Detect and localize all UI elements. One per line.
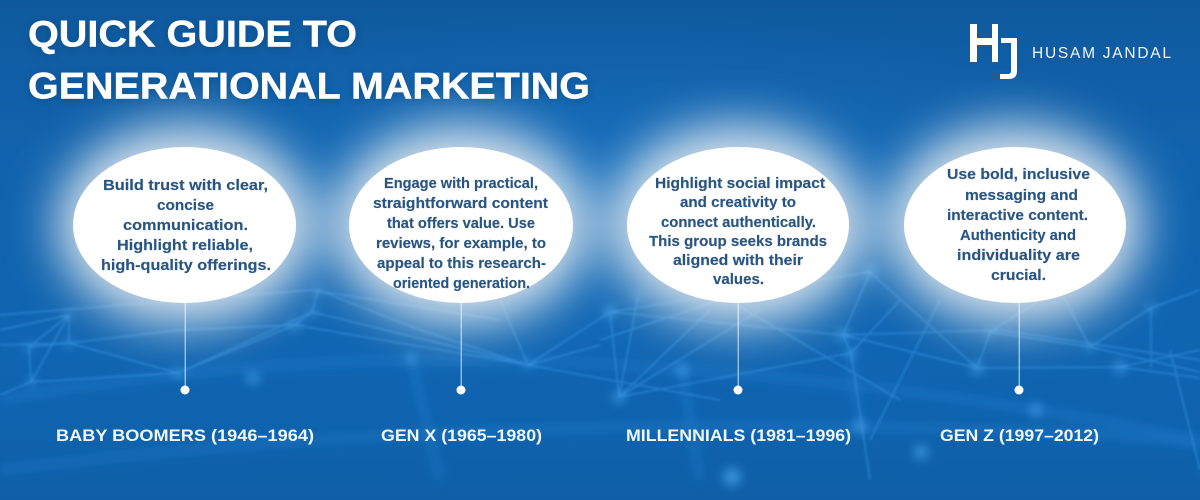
bubble advice text: aligned with their [673, 252, 803, 269]
bubble advice text: connect authentically. [661, 214, 816, 231]
bubble advice text [947, 166, 1090, 284]
panel: Gen Z [904, 147, 1126, 445]
bubble advice text [649, 175, 827, 288]
bubble advice text: that offers value. Use [387, 215, 535, 232]
bubble advice text: crucial. [991, 267, 1046, 284]
bubble [73, 147, 296, 303]
bubble advice text [373, 175, 548, 292]
bubble advice text: oriented generation. [393, 275, 530, 292]
logo: Husam Jandal [970, 24, 1171, 79]
bubble [349, 147, 573, 303]
bubble advice text: Build trust with clear, [103, 177, 268, 194]
bubble advice text: messaging and [965, 187, 1078, 204]
generation label: MILLENNIALS (1981–1996) [626, 426, 851, 445]
bubble advice text: communication. [123, 217, 248, 234]
background network pattern [0, 266, 1200, 486]
bubble advice text [101, 177, 271, 274]
connector line and dot [456, 303, 466, 394]
generation label: GEN Z (1997–2012) [940, 426, 1099, 445]
title: QUICK GUIDE TO [28, 14, 357, 54]
generation label: GEN X (1965–1980) [381, 426, 542, 445]
connector line and dot [1014, 303, 1024, 394]
bubble advice text: reviews, for example, to [376, 235, 546, 252]
bubble advice text: interactive content. [947, 207, 1088, 224]
bubble advice text: Engage with practical, [384, 175, 538, 192]
bubble advice text: This group seeks brands [649, 233, 827, 250]
bubble advice text: and creativity to [680, 194, 796, 211]
bubble advice text: Authenticity and [960, 227, 1076, 244]
panel: Millennials [626, 147, 851, 445]
bubble advice text: high-quality offerings. [101, 257, 271, 274]
panel: Baby Boomers [56, 147, 314, 445]
bubble advice text: Highlight social impact [655, 175, 825, 192]
bubble advice text: straightforward content [373, 195, 548, 212]
bubble [904, 147, 1126, 303]
title: GENERATIONAL MARKETING [28, 66, 590, 106]
bubble advice text: concise [157, 197, 214, 214]
generation label: BABY BOOMERS (1946–1964) [56, 426, 314, 445]
logo wordmark: HUSAM JANDAL [1032, 45, 1171, 62]
glow behind the speech ellipses [57, 125, 1143, 325]
bubble advice text: appeal to this research- [377, 255, 546, 272]
bubble advice text: values. [713, 271, 764, 288]
bubble advice text: Highlight reliable, [117, 237, 253, 254]
connector line and dot [180, 303, 190, 394]
panel: Gen X [349, 147, 573, 445]
icon: HJ monogram [970, 24, 1017, 79]
bubble advice text: individuality are [957, 247, 1080, 264]
connector line and dot [734, 303, 742, 394]
title [28, 14, 590, 106]
bubble advice text: Use bold, inclusive [947, 166, 1090, 183]
bubble [627, 147, 849, 303]
